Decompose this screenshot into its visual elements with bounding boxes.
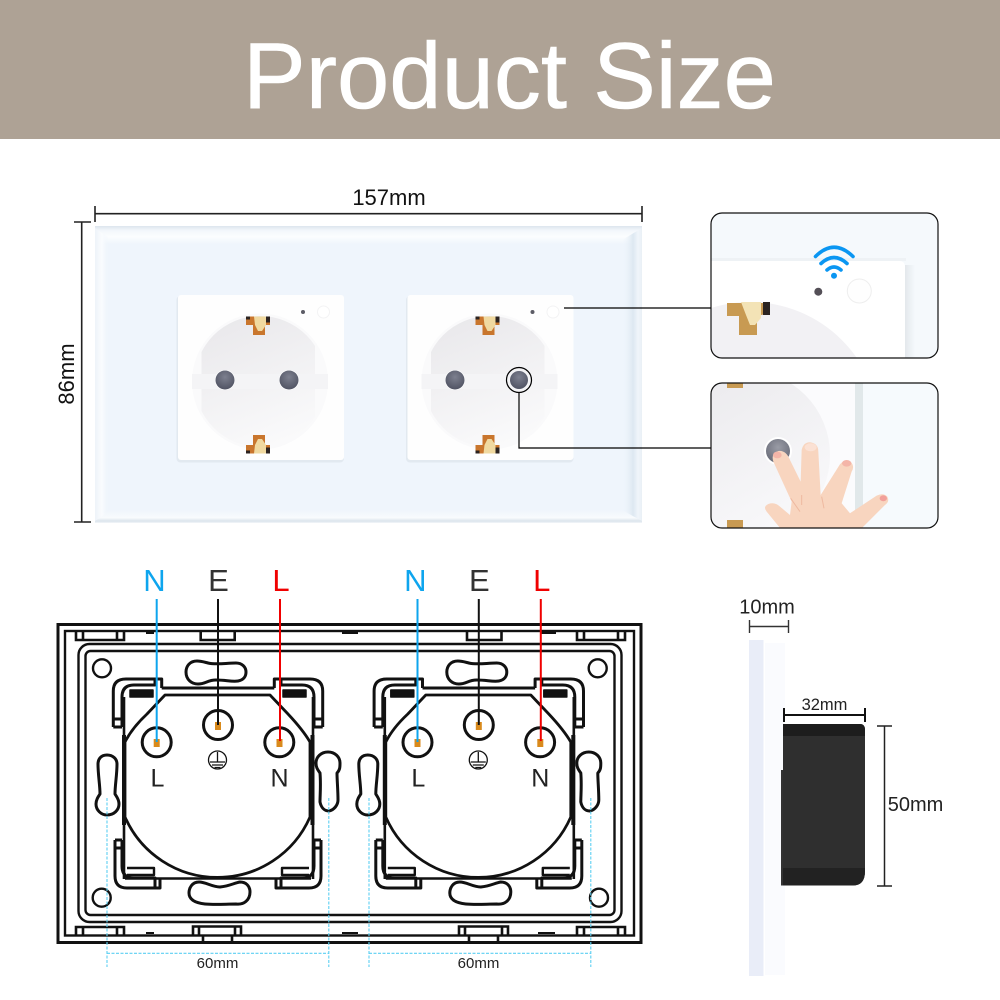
side view: glass and body [749, 640, 865, 976]
label: N E L wires: L [272, 563, 290, 598]
dimension: 60mm spacing [107, 798, 591, 972]
label: N E L wires: E [208, 563, 229, 598]
header band [0, 0, 1000, 139]
dimension: 32mm [784, 696, 865, 722]
dimension: 10mm: 10mm [739, 596, 795, 618]
dimension: width 157mm [95, 185, 642, 222]
right socket [406, 295, 574, 462]
callout: child hand on socket pin [710, 382, 939, 529]
screw holes [93, 659, 608, 907]
label: N E L wires: N [404, 563, 426, 598]
wiring diagram: back view frame [58, 624, 641, 942]
dimension: 60mm spacing: 60mm [197, 955, 238, 972]
wiring diagram: right socket: N [531, 764, 549, 792]
label: N E L wires: E [469, 563, 490, 598]
black module [781, 724, 865, 886]
icon: wifi [816, 247, 853, 278]
top and bottom clips [76, 632, 625, 942]
dimension: 60mm spacing: 60mm [458, 955, 499, 972]
label: N E L wires: L [533, 563, 550, 598]
icon: hand [765, 442, 888, 530]
callout marker: touch ring and leader lines [506, 308, 711, 448]
wiring diagram: left socket [96, 563, 340, 904]
wiring diagram: right socket: L [411, 764, 425, 792]
label: N E L wires: N [143, 563, 166, 598]
label: N E L wires [404, 563, 550, 598]
panel: glass double socket front [95, 226, 642, 523]
callout: wifi button close-up [710, 212, 939, 359]
dimension: 50mm: 50mm [888, 794, 943, 816]
label: N E L wires [143, 563, 290, 598]
dimension: 10mm [739, 596, 795, 633]
wiring diagram: right socket [357, 563, 601, 904]
dimension: height 86mm: 86mm [54, 343, 79, 405]
wiring diagram: left socket: L [151, 764, 165, 792]
wiring diagram: left socket: N [270, 764, 289, 792]
dimension: 50mm [877, 726, 943, 886]
dimension: width 157mm: 157mm [352, 185, 426, 210]
title: Product Size [243, 23, 776, 128]
dimension: 32mm: 32mm [802, 696, 847, 714]
dimension: height 86mm [54, 222, 91, 522]
left socket [176, 295, 344, 462]
